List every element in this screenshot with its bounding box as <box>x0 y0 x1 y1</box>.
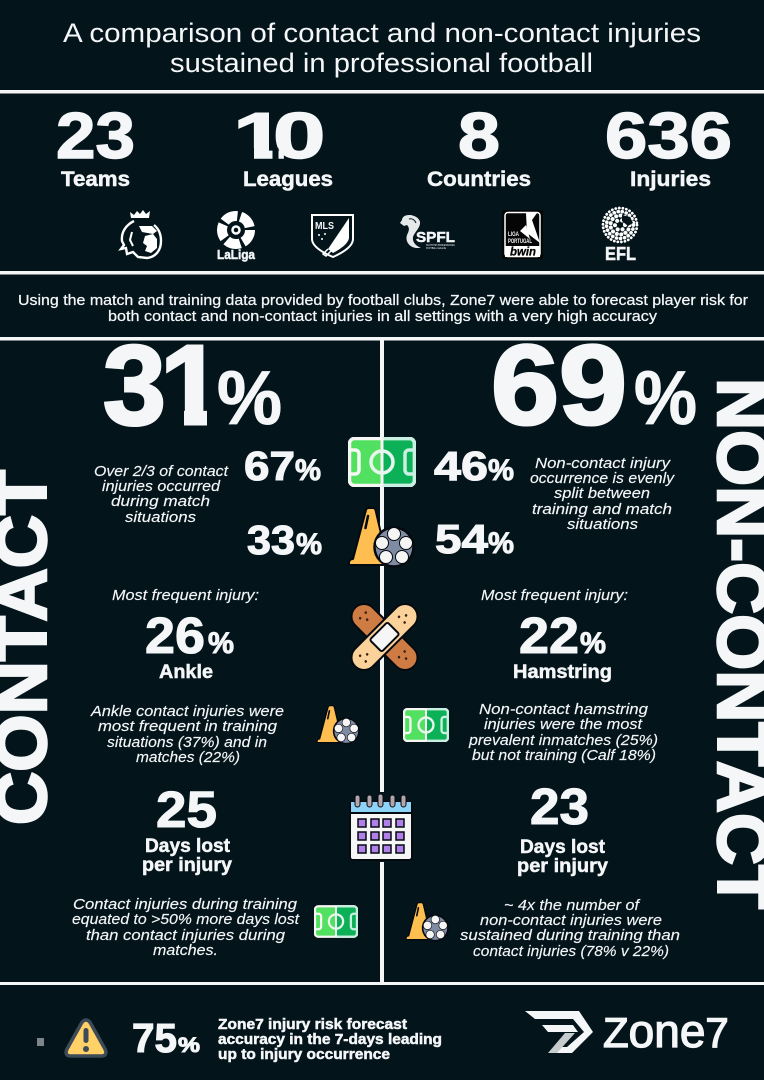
days lost: contact: per injury <box>142 854 232 876</box>
logo: MLS: MLS <box>315 221 334 232</box>
stat: 67%: % <box>295 454 321 487</box>
stat: 46%: % <box>488 454 514 487</box>
stat: 75%: 75 <box>132 1015 177 1061</box>
stat: injuries: Injuries <box>630 168 711 191</box>
logo: Zone7: Zone7 <box>603 1005 729 1057</box>
stat: 54%: 54 <box>435 516 488 562</box>
logo: Liga Portugal bwin: LIGA <box>508 232 520 238</box>
contact training note <box>72 896 300 959</box>
logo: MLS <box>312 215 353 257</box>
footer marker <box>37 1038 44 1046</box>
contact training note: matches. <box>153 942 218 959</box>
ankle note: matches (22%) <box>136 749 240 766</box>
logo: Liga Portugal bwin: bwin <box>510 244 536 258</box>
headline: 69%: 69 <box>491 322 627 448</box>
title: sustained in professional football <box>170 48 593 78</box>
contact match note: situations <box>125 509 197 526</box>
icon: cone and ball small <box>317 706 359 744</box>
intro paragraph: both contact and non-contact injuries in all settings with a very high accuracy <box>108 309 658 325</box>
title <box>63 18 701 78</box>
ankle note: situations (37%) and in <box>107 734 267 751</box>
icon: pitch small <box>404 709 448 741</box>
non-contact training note: non-contact injuries were <box>480 912 662 929</box>
icon: cone and ball lower <box>406 903 448 941</box>
centre divider line <box>380 340 384 983</box>
ankle note: Ankle contact injuries were <box>90 703 284 720</box>
logo: Zone7 <box>525 1005 729 1057</box>
days lost: non-contact <box>517 778 608 877</box>
logo: SPFL: FOOTBALL LEAGUE <box>426 247 446 250</box>
stat: 54% <box>435 516 514 562</box>
non-contact training note <box>460 897 680 960</box>
non-contact training note: ~ 4x the number of <box>504 897 641 914</box>
most frequent injury: non-contact: Most frequent injury: <box>481 587 628 604</box>
stat: countries <box>427 99 531 191</box>
non-contact occurrence note: situations <box>567 516 639 533</box>
stat: 46%: 46 <box>434 443 488 489</box>
most frequent injury: non-contact <box>481 587 628 683</box>
stat: 33%: 33 <box>247 517 295 563</box>
non-contact occurrence note: occurrence is evenly <box>530 470 676 487</box>
non-contact occurrence note: split between <box>554 485 650 502</box>
logo: LaLiga <box>217 216 256 262</box>
headline: 69%: % <box>634 356 697 441</box>
hamstring note: injuries were the most <box>484 716 643 733</box>
most frequent injury: contact: 26 <box>145 607 205 664</box>
stat: 67%: 67 <box>244 443 295 489</box>
days lost: non-contact: per injury <box>517 855 608 877</box>
days lost: non-contact: Days lost <box>520 836 605 858</box>
icon: calendar <box>346 792 416 862</box>
hamstring note: Non-contact hamstring <box>479 701 649 718</box>
headline: 31%: % <box>217 356 282 441</box>
logo: LaLiga: LaLiga <box>217 247 256 262</box>
headline: 69% <box>491 322 697 448</box>
logo: EFL <box>603 208 637 264</box>
logo: SPFL: SPFL <box>416 229 455 246</box>
stat: countries: 8 <box>458 99 500 172</box>
days lost: contact <box>142 781 232 876</box>
forecast accuracy text: up to injury occurrence <box>218 1047 390 1063</box>
stat: 67% <box>244 443 321 489</box>
stat: injuries: 636 <box>605 99 732 172</box>
most frequent injury: contact: Most frequent injury: <box>112 587 259 604</box>
most frequent injury: non-contact: Hamstring <box>513 662 612 683</box>
most frequent injury: contact: Ankle <box>159 662 213 683</box>
title: A comparison of contact and non-contact injuries <box>63 18 701 48</box>
stat: 33% <box>247 517 322 563</box>
icon: pitch small lower <box>315 906 357 937</box>
non-contact training note: contact injuries (78% v 22%) <box>473 943 669 960</box>
logo: Liga Portugal bwin <box>502 210 543 259</box>
headline: 31% <box>103 322 282 448</box>
ankle note <box>90 703 284 766</box>
contact match note <box>94 463 229 526</box>
stat: leagues: 10 <box>233 100 325 172</box>
contact training note: equated to >50% more days lost <box>72 911 300 928</box>
logo: Premier League lion <box>121 210 161 258</box>
icon: pitch <box>350 438 414 486</box>
intro paragraph <box>18 293 748 325</box>
non-contact training note: sustained during training than <box>460 927 680 944</box>
non-contact occurrence note: Non-contact injury <box>535 455 672 472</box>
forecast accuracy text: accuracy in the 7-days leading <box>218 1032 442 1048</box>
logo: EFL: EFL <box>605 244 636 264</box>
headline: 31%: 31 <box>103 322 223 448</box>
stat: 75% <box>132 1015 200 1061</box>
stat: countries: Countries <box>427 168 531 191</box>
icon: crossed bandages <box>346 599 423 675</box>
logo: SPFL: SCOTTISH PROFESSIONAL <box>426 244 456 247</box>
hamstring note <box>468 701 658 764</box>
contact training note: than contact injuries during <box>86 927 286 944</box>
icon: cone and ball <box>349 508 414 566</box>
most frequent injury: non-contact: 22 <box>519 607 579 664</box>
contact training note: Contact injuries during training <box>73 896 298 913</box>
days lost: non-contact: 23 <box>530 778 589 835</box>
most frequent injury: contact: % <box>208 627 234 660</box>
forecast accuracy text <box>218 1017 442 1063</box>
non-contact occurrence note <box>530 455 676 533</box>
forecast accuracy text: Zone7 injury risk forecast <box>218 1017 407 1033</box>
stat: 33%: % <box>296 528 322 561</box>
hamstring note: prevalent inmatches (25%) <box>468 732 658 749</box>
contact match note: during match <box>111 493 210 510</box>
most frequent injury: non-contact: % <box>580 627 606 660</box>
non-contact occurrence note: training and match <box>532 501 672 518</box>
stat: 46% <box>434 443 514 489</box>
stat: 54%: % <box>488 527 514 560</box>
icon: warning <box>66 1020 106 1056</box>
most frequent injury: contact <box>112 587 259 683</box>
logo: SPFL <box>400 215 456 250</box>
stat: 75%: % <box>178 1034 200 1057</box>
logo: Liga Portugal bwin: PORTUGAL <box>508 239 532 245</box>
intro paragraph: Using the match and training data provided by football clubs, Zone7 were able to forecast player risk for <box>18 293 748 309</box>
stat: teams: 23 <box>56 99 135 172</box>
contact match note: injuries occurred <box>102 478 221 495</box>
days lost: contact: Days lost <box>145 835 230 857</box>
stat: leagues: Leagues <box>243 168 333 191</box>
hamstring note: but not training (Calf 18%) <box>472 747 656 764</box>
days lost: contact: 25 <box>156 781 217 838</box>
stat: teams: Teams <box>61 168 130 191</box>
contact match note: Over 2/3 of contact <box>94 463 229 480</box>
stat: injuries <box>605 99 732 191</box>
ankle note: most frequent in training <box>98 718 278 735</box>
